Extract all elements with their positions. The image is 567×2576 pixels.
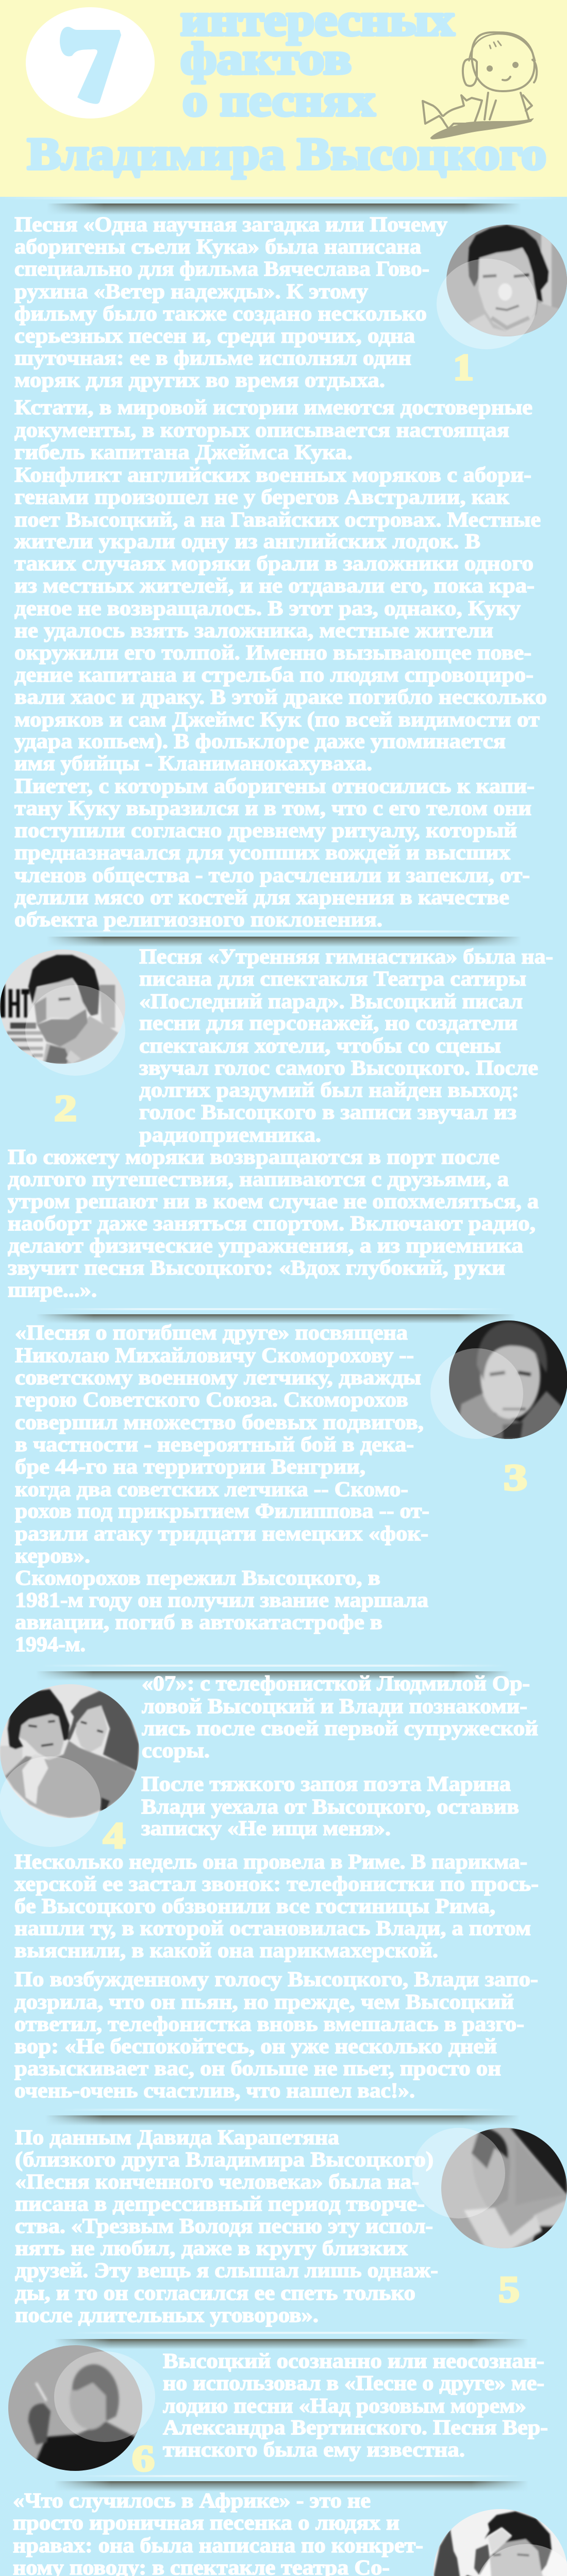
divider	[54, 2332, 528, 2349]
title: фактов	[180, 34, 352, 84]
pale ellipse 5	[412, 2128, 505, 2218]
text: fact 5: По данным Давида Карапетяна	[15, 2125, 339, 2149]
divider	[36, 1665, 510, 1681]
text: fact 2: долгого путешествия, напиваются с друзьями, а	[8, 1167, 509, 1191]
text: fact 2: шире...».	[8, 1278, 97, 1301]
text: fact 4: По возбужденному голосу Высоцкого, Влади запо-	[14, 1967, 538, 1991]
text: fact 4: херской ее застал звонок: телефонистки по прось-	[14, 1872, 539, 1895]
text: fact 3: 1994-м.	[15, 1632, 86, 1656]
photo: portrait 1	[443, 222, 567, 340]
text: fact 5: после длительных уговоров».	[15, 2303, 319, 2327]
text: fact 1: серьезных песен и, среди прочих, одна	[14, 324, 415, 347]
text: fact 3: когда два советских летчика -- Скомо-	[15, 1477, 408, 1501]
text: fact 3	[15, 1320, 429, 1656]
text: fact 5: (близкого друга Владимира Высоцкого)	[15, 2147, 433, 2171]
text: fact 3: авиации, погиб в автокатастрофе в	[15, 1610, 382, 1634]
pale ellipse 3	[430, 1348, 523, 1439]
text: fact 4: дозрила, что он пьян, но прежде, чем Высоцкий	[14, 1990, 514, 2013]
text: fact 4: бе Высоцкого обзвонили все гостиницы Рима,	[14, 1894, 495, 1918]
text: fact 4: вор: «Не беспокойтесь, он уже несколько дней	[14, 2034, 497, 2058]
text: fact 5: «Песня конченного человека» была на-	[15, 2170, 419, 2193]
text: fact 1: тану Куку выразился и в том, что с его телом они	[14, 796, 531, 820]
text: fact 4: ответил, телефонистка вновь вмешалась в разго-	[14, 2012, 524, 2036]
divider	[26, 197, 541, 214]
text: fact 3: в частности - невероятный бой в дека-	[15, 1432, 414, 1456]
text: fact 2: долгих раздумий был найден выход:	[139, 1078, 519, 1101]
number 4: 4	[103, 1815, 125, 1856]
text: fact 3: Скоморохов пережил Высоцкого, в	[15, 1566, 380, 1589]
text: fact 1: имя убийцы - Кланиманокахуваха.	[14, 751, 372, 775]
text: fact 6: Высоцкий осознанно или неосознан-	[163, 2349, 544, 2372]
text: fact 4: ссоры.	[142, 1738, 210, 1762]
text: fact 3: совершил множество боевых подвигов,	[15, 1410, 424, 1434]
text: fact 2: писана для спектакля Театра сатиры	[139, 967, 526, 990]
title: Владимира Высоцкого	[27, 129, 546, 179]
text: fact 4	[14, 1671, 539, 2102]
pale ellipse 6	[54, 2351, 155, 2442]
divider	[47, 930, 521, 947]
text: fact 1: Конфликт английских военных моряков с абори-	[14, 463, 531, 486]
icon: child in headphones with duckling	[423, 32, 537, 139]
number 6: 6	[132, 2438, 155, 2479]
text: fact 1: поступили согласно древнему ритуалу, который	[14, 818, 517, 842]
text: fact 4: После тяжкого запоя поэта Марина	[141, 1772, 511, 1795]
text: fact 3: разили атаку тридцати немецких «фок-	[15, 1521, 428, 1545]
text: fact 2: делают физические упражнения, а из приемника	[8, 1233, 523, 1257]
text: fact 3: керов».	[15, 1544, 90, 1567]
text: fact 1: вали хаос и драку. В этой драке погибло несколько	[14, 685, 547, 708]
text: fact 1: гибель капитана Джеймса Кука.	[14, 440, 353, 464]
text: fact 3: рохов под прикрытием Филиппова -- от-	[15, 1499, 429, 1522]
text: fact 1: дение капитана и стрельба по людям спровоциро-	[14, 663, 533, 686]
number 1: 1	[453, 347, 474, 388]
text: fact 2: песни для персонажей, но создатели	[139, 1011, 518, 1035]
divider	[45, 2109, 520, 2126]
text: fact 5: друзей. Эту вещь я слышал лишь однаж-	[15, 2258, 438, 2282]
text: fact 2: спектакля хотели, чтобы со сцены	[139, 1033, 501, 1057]
text: fact 4: разыскивает вас, он больше не пьет, просто он	[14, 2056, 501, 2080]
text: fact 1: из местных жителей, и не отдавали его, пока кра-	[14, 573, 535, 597]
text: fact 1: жители украли одну из английских лодок. В	[14, 529, 480, 553]
text: fact 4: Несколько недель она провела в Риме. В парикма-	[14, 1850, 527, 1873]
text: fact 1: деное не возвращалось. В этот раз, однако, Куку	[14, 596, 521, 620]
photo: portrait 4	[0, 1682, 140, 1820]
text: fact 6	[163, 2349, 548, 2461]
text: fact 2: звучит песня Высоцкого: «Вдох глубокий, руки	[8, 1256, 505, 1279]
text: fact 1: Кстати, в мировой истории имеются достоверные	[14, 395, 532, 419]
panel: fact 7	[10, 2488, 567, 2576]
text: fact 4: Влади уехала от Высоцкого, оставив	[141, 1794, 519, 1818]
pale ellipse 4	[0, 1756, 101, 1847]
photo: portrait 7	[433, 2506, 567, 2576]
text: fact 3: «Песня о погибшем друге» посвящена	[15, 1320, 408, 1344]
text: fact 2: По сюжету моряки возвращаются в порт после	[8, 1145, 499, 1168]
text: fact 3: 1981-м году он получил звание маршала	[15, 1588, 428, 1612]
text: fact 4: ловой Высоцкий и Влади познакоми-	[142, 1694, 527, 1718]
text: fact 1: не удалось взять заложника, местные жители	[14, 618, 493, 642]
text: fact 3: герою Советского Союза. Скоморохов	[15, 1387, 408, 1411]
text: fact 2: утром решают ни в коем случае не опохмеляться, а	[8, 1189, 539, 1213]
text: fact 1: удара копьем). В фольклоре даже упоминается	[14, 729, 506, 753]
text: fact 1: членов общества - тело расчленили и запекли, от-	[14, 863, 530, 887]
text: fact 4: лись после своей первой супружеской	[142, 1716, 538, 1740]
text: fact 1: Пиетет, с которым аборигены относились к капи-	[14, 774, 535, 798]
text: fact 1: шуточная: ее в фильме исполнял один	[14, 346, 411, 369]
text: fact 2	[8, 944, 553, 1301]
text: fact 5: ды, и то он согласился ее спеть только	[15, 2281, 415, 2304]
divider	[36, 1308, 515, 1324]
text: fact 1: таких случаях моряки брали в заложники одного	[14, 551, 533, 575]
text: fact 6: Александра Вертинского. Песня Вер-	[163, 2415, 548, 2439]
panel: fact 1	[14, 212, 567, 931]
panel: fact 4	[0, 1671, 539, 2102]
text: fact 1: аборигены съели Кука» была написана	[14, 234, 421, 258]
text: fact 4: выяснили, в какой она парикмахерской.	[14, 1938, 438, 1962]
text: fact 3: Николаю Михайловичу Скоморохову --	[15, 1343, 414, 1367]
text: fact 5: писана в депрессивный период творче-	[15, 2192, 425, 2215]
number 3: 3	[504, 1457, 527, 1498]
text: fact 1: фильму было также создано несколько	[14, 301, 427, 325]
text: fact 6: лодию песни «Над розовым морем»	[163, 2394, 526, 2417]
text: fact 7: просто ироничная песенка о людях и	[13, 2511, 399, 2534]
badge: number 7	[26, 7, 155, 118]
photo: portrait 3	[448, 1319, 567, 1443]
text: fact 2: «Последний парад». Высоцкий писал	[139, 989, 523, 1013]
number 2: 2	[54, 1088, 77, 1129]
text: fact 5: нять не любил, даже в кругу близких	[15, 2236, 408, 2260]
divider	[54, 2475, 528, 2492]
text: fact 6: но использовал в «Песне о друге» ме-	[163, 2371, 544, 2395]
text: fact 4: нашли ту, в которой остановилась Влади, а потом	[14, 1916, 531, 1940]
text: fact 1: делили мясо от костей для харнения в качестве	[14, 885, 509, 909]
text: fact 1: окружили его толпой. Именно вызывающее пове-	[14, 640, 531, 664]
text: fact 2: Песня «Утренняя гимнастика» была на-	[139, 944, 553, 968]
header panel	[0, 0, 567, 197]
photo: portrait 5	[441, 2125, 567, 2251]
pale ellipse 7	[476, 2544, 567, 2576]
text: fact 1: поет Высоцкий, а на Гавайских островах. Местные	[14, 507, 541, 531]
text: fact 5: ства. «Трезвым Володя песню эту испол-	[15, 2214, 433, 2238]
panel: fact 2	[0, 944, 553, 1301]
panel: fact 5	[15, 2125, 567, 2327]
text: fact 7: «Что случилось в Африке» - это не	[13, 2488, 371, 2512]
text: fact 1: объекта религиозного поклонения.	[14, 907, 382, 931]
text: fact 1: документы, в которых описывается настоящая	[14, 418, 509, 442]
text: fact 3: бре 44-го на территории Венгрии,	[15, 1454, 365, 1478]
text: fact 7: нравах: она была написана по конкрет-	[13, 2533, 423, 2557]
text: fact 1: специально для фильма Вячеслава Гово-	[14, 257, 429, 280]
number 5: 5	[498, 2269, 520, 2310]
text: fact 6: тинского была ему известна.	[163, 2437, 465, 2461]
panel: fact 3	[15, 1319, 567, 1656]
text: fact 1	[14, 212, 547, 931]
text: fact 2: звучал голос самого Высоцкого. После	[139, 1056, 538, 1079]
text: fact 1: рухина «Ветер надежды». К этому	[14, 279, 369, 303]
text: fact 4: «07»: с телефонисткой Людмилой Ор-	[142, 1671, 530, 1695]
text: fact 4: записку «Не ищи меня».	[141, 1816, 391, 1840]
photo: portrait 2	[0, 948, 126, 1066]
text: fact 1: моряк для других во время отдыха.	[14, 368, 385, 392]
pale ellipse 1	[437, 259, 537, 349]
pale ellipse 2	[25, 985, 125, 1076]
photo: portrait 6	[5, 2343, 144, 2473]
text: fact 2: наоборт даже заняться спортом. Включают радио,	[8, 1211, 536, 1235]
text: fact 1: предназначался для усопших вождей и высших	[14, 840, 511, 864]
text: fact 5	[15, 2125, 438, 2327]
text: fact 2: голос Высоцкого в записи звучал из	[139, 1100, 516, 1124]
panel: fact 6	[5, 2343, 548, 2479]
text: fact 7	[10, 2488, 548, 2576]
title: о песнях	[182, 76, 375, 126]
text: fact 2: радиоприемника.	[139, 1123, 321, 1146]
text: fact 1: генами произошел не у берегов Австралии, как	[14, 485, 509, 509]
text: fact 3: советскому военному летчику, дважды	[15, 1365, 421, 1389]
title	[27, 0, 546, 179]
text: fact 1: моряков и сам Джеймс Кук (по всей видимости от	[14, 707, 540, 731]
text: fact 1: Песня «Одна научная загадка или Почему	[14, 212, 448, 236]
text: fact 4: очень-очень счастлив, что нашел вас!».	[14, 2078, 415, 2102]
